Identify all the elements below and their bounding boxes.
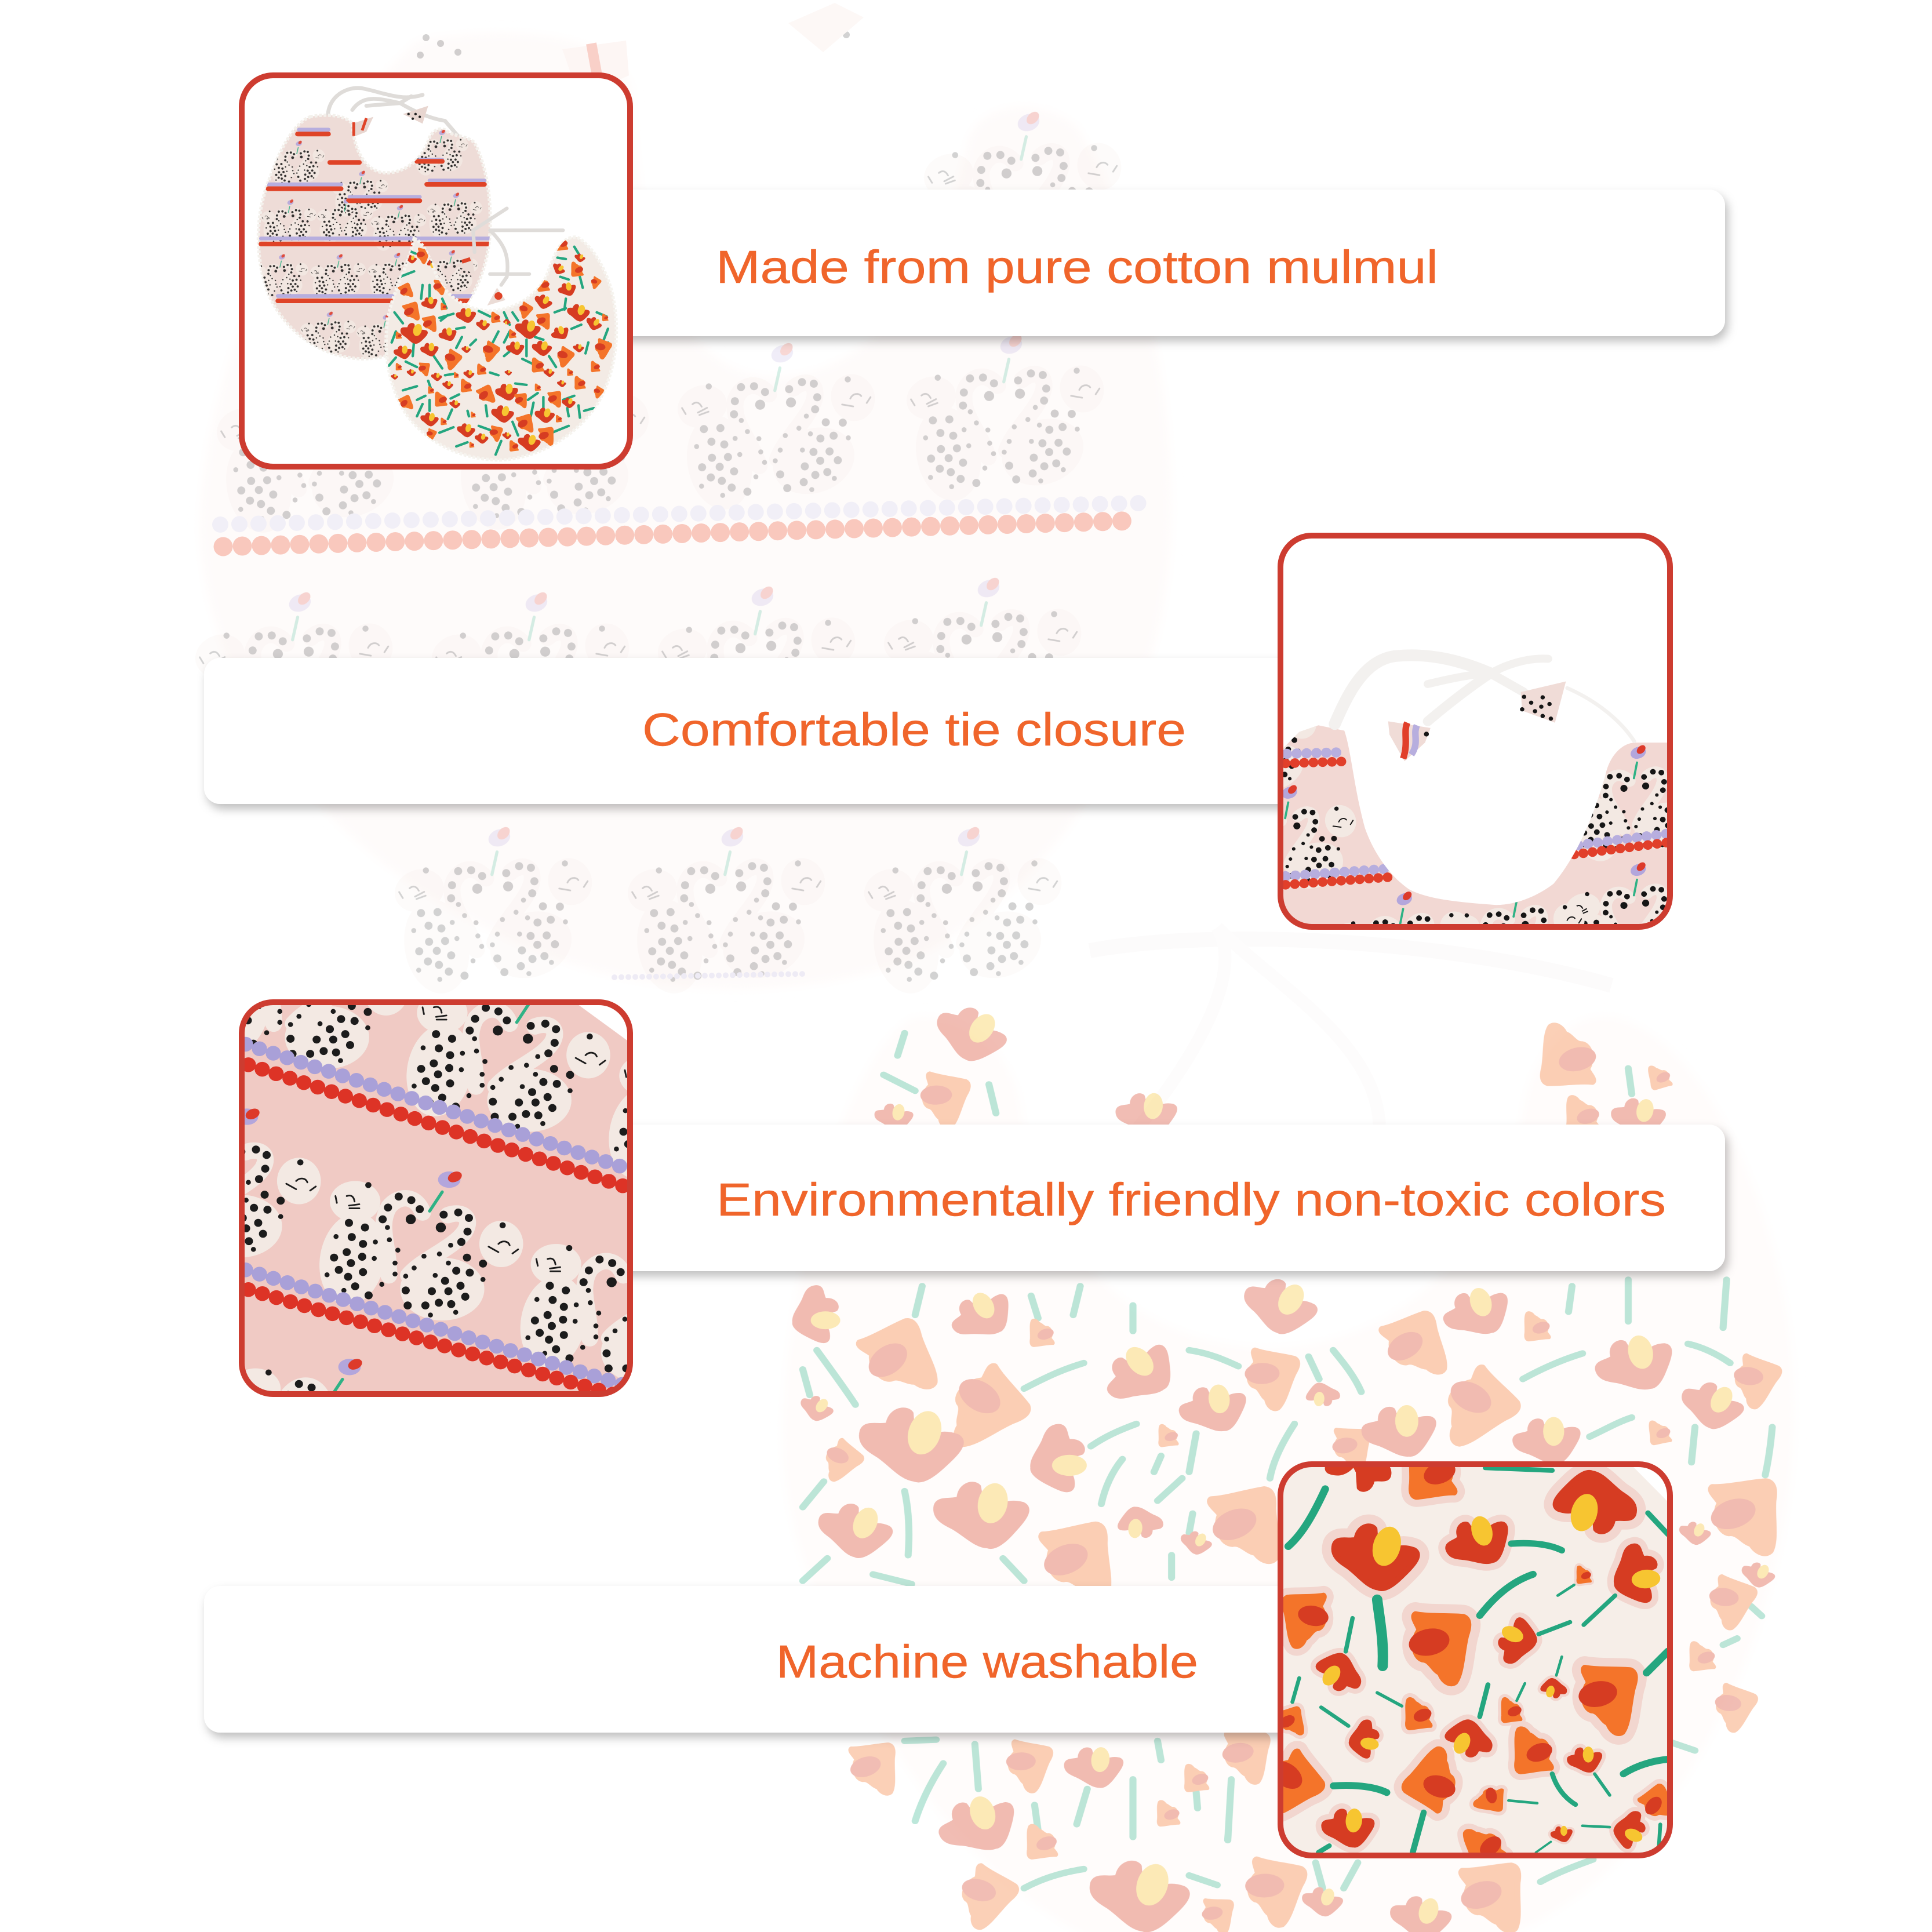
- photo frame: floral print close-up: [1246, 1437, 1701, 1875]
- stripes: [246, 1044, 634, 1399]
- tie tip: striped: [1388, 721, 1431, 761]
- floral bib body: [386, 237, 616, 460]
- green stems: [1288, 1468, 1668, 1853]
- feature bar: Comfortable tie closure: [204, 658, 1304, 804]
- tie tip: dotted: [1521, 682, 1566, 723]
- feature bar: Made from pure cotton mulmul: Made from pure cotton mulmul: [716, 241, 1438, 293]
- ties of the cat bib: [328, 88, 459, 137]
- photo frame: tie closure: [1278, 533, 1673, 930]
- pennant of the cat bib: [352, 117, 373, 137]
- background faded bib: floral print: [782, 927, 1795, 1932]
- ties of the floral bib: [473, 209, 563, 285]
- feature bar: Machine washable: [204, 1586, 1304, 1733]
- feature bar: Machine washable: Machine washable: [776, 1636, 1198, 1687]
- photo frame: two bibs: [242, 75, 630, 467]
- fabric ties and knot: [1335, 655, 1634, 741]
- feature bar: Environmentally friendly non-toxic colors: [609, 1125, 1725, 1271]
- feature bar: Made from pure cotton mulmul: [609, 190, 1725, 336]
- feature bar: Comfortable tie closure: Comfortable tie closure: [642, 704, 1186, 755]
- background faded bib: cat print: [169, 3, 1171, 1019]
- feature bar: Environmentally friendly non-toxic colors: Environmentally friendly non-toxic colors: [716, 1174, 1666, 1225]
- photo frame: cat print close-up: [110, 918, 813, 1572]
